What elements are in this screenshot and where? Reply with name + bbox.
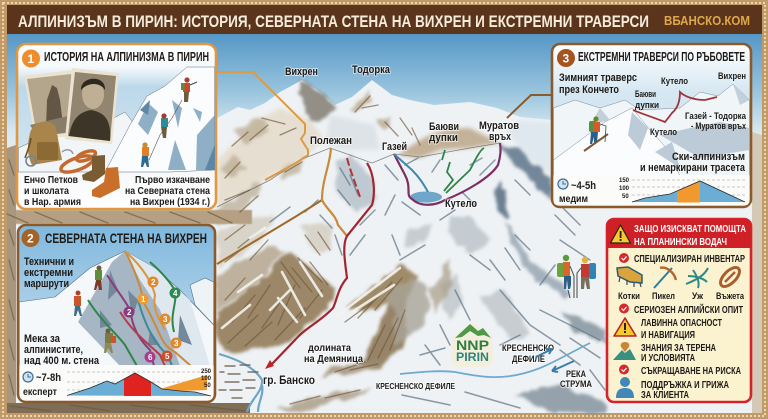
caption: first ascent	[125, 174, 210, 208]
ridge scene	[554, 84, 750, 176]
text: ski mountaineering: и немаркирани трасета	[640, 162, 746, 174]
route markers: 6	[148, 353, 153, 362]
map label: долината на Демяница: долината	[308, 342, 351, 354]
text: technical routes: Технични и	[24, 256, 74, 268]
map label: Кресненско дефиле right: ДЕФИЛЕ	[512, 354, 545, 365]
heading badge 2: 2	[27, 232, 34, 246]
text: terrain: И УСЛОВИЯТА	[641, 353, 695, 364]
heading: СЕВЕРНАТА СТЕНА НА ВИХРЕН	[45, 230, 207, 246]
ridge labels: Вихрен	[718, 71, 746, 82]
check: experience	[619, 303, 743, 316]
icon: client support	[616, 377, 634, 398]
caption: Енчо Петков: Енчо Петков	[24, 174, 78, 186]
main brown spur	[217, 250, 334, 352]
panel: why a guide is needed	[607, 219, 751, 402]
margins behind panels	[7, 210, 252, 224]
map label: Полежан: Полежан	[310, 135, 352, 147]
elevation profile: 250	[201, 369, 212, 375]
route markers: 3	[174, 339, 179, 348]
text: mecca for climbers	[24, 333, 100, 367]
connector: panel 3 to Muratov	[507, 95, 551, 118]
left shoulder rock patches	[217, 118, 305, 225]
heading badge 3: 3	[562, 52, 570, 66]
elevation profile: 50	[622, 194, 629, 200]
heading badge 3	[557, 49, 575, 67]
ridge labels: - Муратов връх	[691, 121, 747, 132]
difficulty: медим	[559, 193, 588, 205]
logo: NNP Pirin: NNP	[456, 337, 489, 353]
text: winter traverse: Зимният траверс	[559, 72, 637, 84]
logo: NNP Pirin	[451, 322, 493, 367]
snowy slopes with rock under shoulder	[217, 215, 335, 268]
far right ridge	[505, 120, 551, 175]
sky	[7, 34, 762, 164]
purple route around the lake	[394, 143, 501, 205]
climbing routes	[88, 251, 191, 366]
icon: cord	[686, 268, 708, 288]
connector: panel 1 to Polezhan	[217, 72, 308, 180]
blue route from Gazei	[394, 154, 428, 192]
text: mecca for climbers: алпинистите,	[24, 344, 83, 356]
caption: first ascent: на Северната стена	[125, 185, 210, 197]
elevation profile: 50	[204, 383, 211, 389]
grey-blue snow hachures	[270, 158, 605, 408]
icon: terrain pin	[613, 342, 636, 360]
stats strip	[554, 175, 750, 206]
green routes	[442, 148, 484, 193]
map label: долината на Демяница: на Демяница	[304, 353, 363, 365]
text: technical routes: екстремни	[24, 267, 73, 279]
check: inventory	[619, 253, 745, 265]
upper left brown spur	[217, 245, 285, 312]
Polezhan ridge line	[217, 143, 500, 207]
Todorka rock	[350, 90, 392, 130]
map label: река Струма	[560, 369, 592, 390]
caption: first ascent: Първо изкачване	[135, 174, 210, 186]
route markers: 2	[127, 308, 132, 317]
map label: долината на Демяница	[304, 342, 363, 365]
icon: rope	[717, 264, 743, 290]
stats strip	[20, 365, 214, 400]
route markers: 3	[163, 315, 168, 324]
snow base of the range	[7, 80, 762, 413]
panel 2: north face	[18, 225, 215, 402]
equipment labels: Уж	[692, 291, 703, 302]
text: client care	[641, 380, 729, 401]
header text	[634, 224, 746, 248]
elevation profile	[67, 369, 212, 396]
arrow: down the river	[552, 361, 574, 372]
route markers: 5	[165, 352, 170, 361]
ridge labels: Баюви	[635, 89, 656, 100]
map label: Вихрен: Вихрен	[285, 66, 318, 78]
icon: ice axe	[654, 268, 676, 288]
text: technical routes	[24, 256, 74, 290]
icon: avalanche warning	[614, 318, 636, 336]
icon: climbing rope	[59, 149, 97, 175]
ridge labels: Кутело	[661, 76, 688, 87]
elevation profile: 100	[201, 376, 212, 382]
low background ridge	[18, 112, 135, 172]
map label: Муратов връх: връх	[489, 131, 512, 143]
text: mecca for climbers: над 400 м. стена	[24, 355, 100, 367]
text: avalanche: ЛАВИННА ОПАСНОСТ	[641, 318, 722, 329]
text: ski mountaineering	[640, 151, 746, 174]
Vihren dark summit	[298, 80, 337, 122]
map label: Кресненско дефиле right: КРЕСНЕНСКО	[502, 343, 554, 354]
icon: clock	[23, 372, 33, 382]
map label: река Струма: СТРУМА	[560, 379, 592, 390]
text: mecca for climbers: Мека за	[24, 333, 61, 345]
equipment labels	[618, 291, 745, 302]
Bansko river	[219, 354, 262, 412]
snowy climbing slope	[105, 67, 215, 172]
map label: Кутело: Кутело	[445, 198, 477, 210]
header text: НА ПЛАНИНСКИ ВОДАЧ	[634, 237, 727, 248]
map label: Тодорка: Тодорка	[352, 64, 391, 76]
text: client care: ПОДДРЪЖКА И ГРИЖА	[641, 380, 729, 391]
map label: Баюви дупки: дупки	[429, 132, 458, 144]
duration: ~7-8h	[36, 372, 61, 384]
tan saddle under Bayuvi dupki	[398, 128, 500, 158]
ridge labels: дупки	[635, 100, 659, 111]
elevation profile: 100	[619, 186, 630, 192]
text: avalanche	[641, 318, 722, 341]
valley floor	[320, 358, 385, 378]
elevation profile	[619, 178, 745, 202]
Vihren massif pale rock	[217, 108, 325, 207]
text: terrain	[641, 343, 716, 364]
heading badge 1	[22, 50, 40, 68]
north face mountain	[19, 251, 214, 366]
icon: rucksack	[25, 122, 73, 166]
route markers: 4	[173, 289, 178, 298]
text: winter traverse	[559, 72, 637, 96]
connector: panel 2 to the valley	[217, 200, 322, 264]
old photo right: Encho Petkov	[65, 68, 119, 144]
caption: Енчо Петков: и школата	[24, 185, 69, 197]
red header	[607, 219, 751, 248]
difficulty: експерт	[23, 386, 57, 398]
equipment labels: Въжета	[716, 291, 745, 302]
ski-climber	[589, 121, 596, 132]
climbers	[141, 77, 197, 167]
rope	[149, 100, 182, 160]
panel 3: traverses	[552, 44, 751, 207]
route markers	[124, 276, 182, 362]
ridge labels: Газей - Тодорка	[685, 111, 747, 122]
ridge labels	[635, 71, 747, 138]
heading: ИСТОРИЯ НА АЛПИНИЗМА В ПИРИН	[44, 50, 209, 64]
arrow: up the defile	[536, 349, 552, 357]
map label: река Струма: РЕКА	[566, 369, 586, 380]
map label: Баюви дупки	[429, 121, 459, 144]
traverse route	[633, 92, 717, 122]
Bansko town	[219, 365, 258, 398]
map label: Муратов връх: Муратов	[479, 120, 519, 132]
icon: boots	[82, 155, 120, 198]
lake	[410, 192, 442, 202]
arrowhead to Bansko	[265, 360, 274, 369]
map label: Муратов връх	[479, 120, 519, 143]
caption: Енчо Петков	[24, 174, 81, 208]
climbers on the face	[74, 266, 116, 353]
map label: Кресненско дефиле bottom: КРЕСНЕНСКО ДЕФИЛЕ	[376, 381, 455, 391]
old photo left	[24, 70, 78, 140]
pale snow gullies	[222, 228, 400, 328]
check: risk	[619, 364, 741, 377]
panel 1: history	[17, 44, 216, 209]
caption: first ascent: на Вихрен (1934 г.)	[130, 196, 210, 208]
ridge labels: Кутело	[650, 127, 677, 138]
red route to Bansko	[271, 163, 374, 365]
brown spur right of valley	[345, 265, 418, 312]
equipment labels: Пикел	[652, 291, 675, 302]
route markers: 2	[151, 278, 156, 287]
text: avalanche: И НАВИГАЦИЯ	[641, 330, 695, 341]
map label: Кресненско дефиле right	[502, 343, 554, 365]
route markers: 1	[141, 295, 146, 304]
heading badge 1: 1	[28, 52, 34, 66]
text: ski mountaineering: Ски-алпинизъм	[672, 151, 745, 163]
map label: Баюви дупки: Баюви	[429, 121, 459, 133]
logo: NNP Pirin: PIRIN	[456, 350, 489, 364]
icon: two hikers	[557, 255, 596, 298]
header bar	[7, 5, 762, 34]
lower right shadows	[515, 310, 606, 413]
Struma river	[400, 343, 590, 377]
text: technical routes: маршрути	[24, 278, 69, 290]
equipment labels: Котки	[618, 291, 640, 302]
heading badge 2	[22, 229, 40, 247]
red side route	[347, 158, 360, 197]
map label: гр. Банско: гр. Банско	[263, 375, 315, 387]
dark ridge of Muratov	[500, 143, 552, 200]
text: winter traverse: през Кончето	[559, 84, 619, 96]
elevation profile: 150	[619, 178, 630, 184]
text: client care: ЗА КЛИЕНТА	[641, 390, 689, 401]
rock patches around centre	[385, 275, 430, 345]
icon: warning header	[610, 225, 630, 243]
map label: Газей: Газей	[382, 141, 407, 153]
rock hachures brown	[7, 96, 420, 411]
text: terrain: ЗНАНИЯ ЗА ТЕРЕНА	[641, 343, 716, 354]
faint shading beneath summit	[325, 115, 380, 150]
icon: clock	[558, 179, 568, 189]
caption: Енчо Петков: в Нар. армия	[24, 196, 81, 208]
brand name: ВБАНСКО.КОМ	[664, 13, 750, 28]
orange route from Polezhan	[322, 148, 347, 236]
Polezhan snow front with blue rock	[335, 155, 375, 212]
icon: crampons	[617, 267, 642, 287]
duration: ~4-5h	[571, 180, 596, 192]
